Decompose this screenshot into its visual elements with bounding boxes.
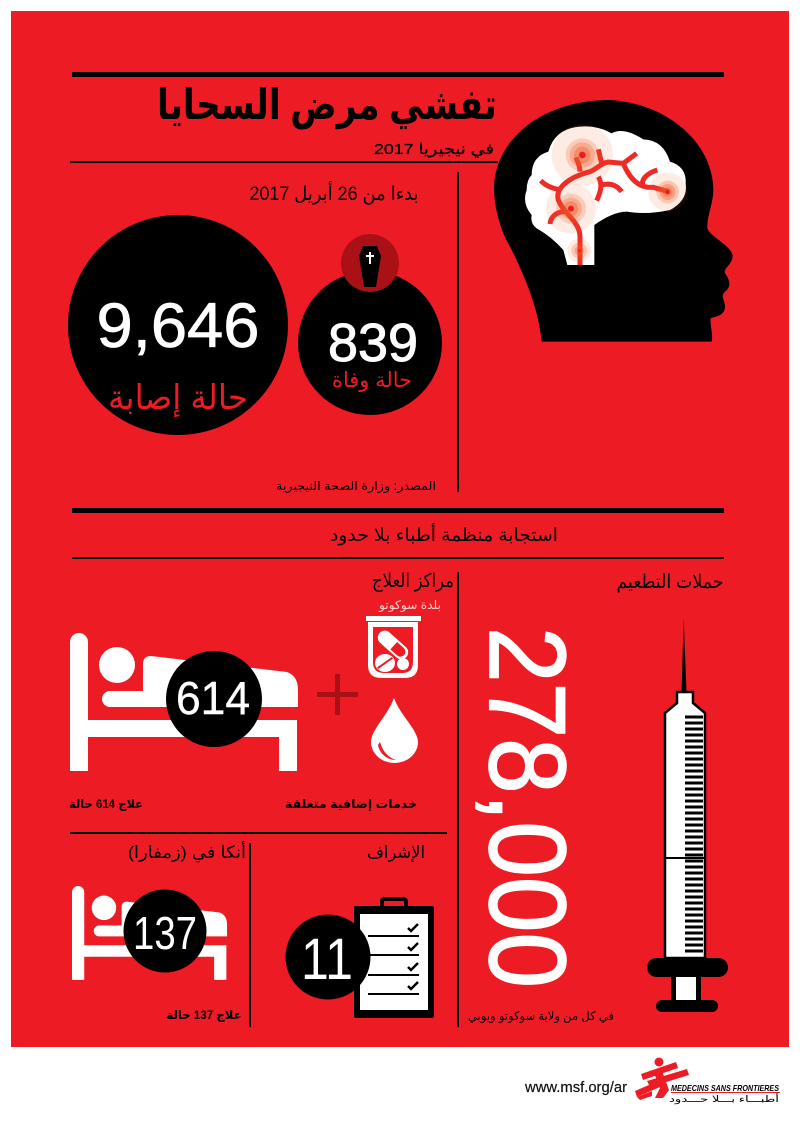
icon: medicine jar (366, 616, 421, 678)
icon: blood drop (371, 698, 418, 763)
plus sign (317, 674, 358, 715)
source note: المصدر: وزارة الصحة النيجيرية (276, 479, 436, 494)
stat: 11 (286, 914, 370, 1000)
logo: MSF (635, 1058, 780, 1104)
caption: related services: خدمات إضافية متعلقة (285, 797, 417, 811)
stat: 614: 614 (176, 672, 250, 724)
stat: deaths (298, 234, 442, 415)
stat: 11: 11 (301, 927, 353, 992)
subtitle: في نيجيريا 2017 (374, 141, 494, 159)
stat: deaths: حالة وفاة (332, 369, 412, 392)
caption: Sokoto and Yobe: في كل من ولاية سوكوتو ويوبي (468, 1009, 614, 1024)
icon: coffin (359, 246, 381, 287)
stat: 614 (166, 651, 262, 747)
website: www.msf.org/ar (524, 1079, 627, 1096)
stat: deaths: 839 (328, 313, 418, 373)
caption: 137 cases treated: علاج 137 حالة (166, 1008, 242, 1022)
icon: syringe (647, 619, 728, 1012)
start date: بدءا من 26 أبريل 2017 (250, 181, 418, 205)
logo: MSF: أطبـــاء بـــلا حـــدود (669, 1093, 779, 1104)
heading: Anka: أنكا في (زمفارا) (128, 841, 246, 863)
heading: supervision: الإشراف (367, 843, 425, 862)
icon: running man (635, 1058, 689, 1100)
icon: small bed with patient (72, 886, 227, 980)
icon: clipboard (354, 897, 434, 1018)
stat: 137: 137 (133, 907, 197, 959)
caption: 614 cases treated: علاج 614 حالة (69, 797, 143, 811)
stat: 137 (124, 890, 206, 972)
section heading: استجابة منظمة أطباء بلا حدود (330, 523, 558, 546)
heading: treatment centres: مراكز العلاج (372, 571, 454, 592)
stat: cases: حالة إصابة (108, 379, 248, 418)
subheading: Sokoto: بلدة سوكوتو (378, 598, 441, 613)
heading: vaccination campaigns: حملات التطعيم (616, 572, 724, 593)
stat: cases: 9,646 (96, 291, 260, 361)
stat: 278,000 vaccinated: 278,000 (466, 627, 588, 988)
logo: MSF: MEDECINS SANS FRONTIERES (671, 1083, 779, 1093)
title: تفشي مرض السحايا (157, 81, 497, 130)
icon: head with brain (494, 100, 733, 342)
icon: large bed with patient (70, 633, 298, 771)
stat: cases (68, 215, 288, 435)
